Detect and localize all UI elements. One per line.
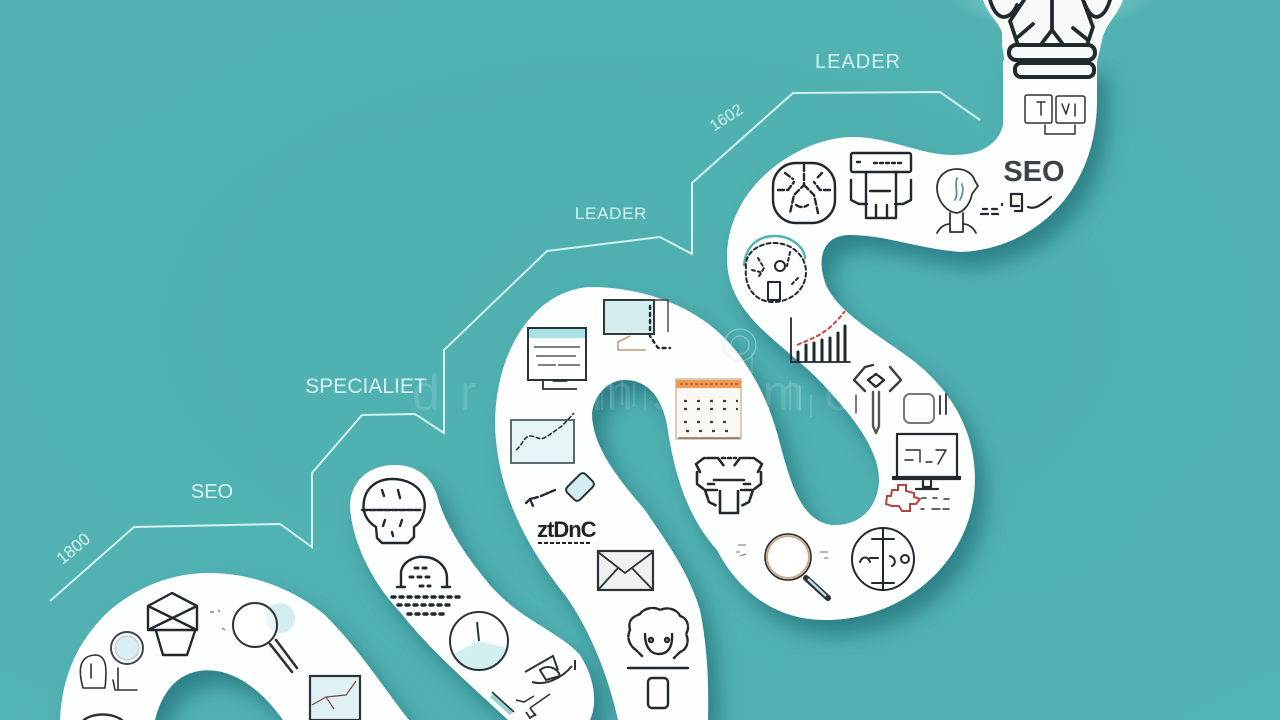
icon: bust and small plot — [80, 655, 137, 690]
icon: small glyph squiggle under SEO — [981, 194, 1051, 214]
icon: calendar with orange header — [676, 379, 741, 439]
road segment: lower-left arch — [60, 573, 409, 720]
icon: magnifier on road — [736, 534, 828, 598]
icon: laptop with chart — [893, 434, 960, 489]
road segment: main S curve up to the bulb — [495, 60, 1097, 720]
icon: dotted dome — [392, 557, 460, 614]
watermark: faint stock text — [412, 329, 852, 421]
icon: bracket and pencil — [854, 365, 901, 433]
label: LEADER top: LEADER — [815, 51, 901, 73]
icon: phone tile — [526, 471, 596, 506]
icon: envelope basket — [148, 593, 197, 655]
icon: envelope — [598, 551, 653, 590]
icon: blocky robot window — [851, 153, 911, 218]
chart: bar chart with red trend — [791, 311, 850, 362]
career path line — [50, 92, 980, 601]
icon: rounded circuit brain — [773, 163, 835, 223]
icon: dotted head brain — [362, 479, 425, 543]
icon: glowing brain light bulb — [952, 0, 1152, 80]
icon: light bulb person — [937, 169, 978, 233]
heading: SEO: SEO — [1003, 156, 1065, 188]
icon: circle brain — [852, 528, 914, 590]
icon: framed picture — [310, 676, 360, 720]
label: SEO path: SEO — [191, 481, 233, 503]
icon: stub near road bottom — [526, 708, 536, 718]
icon: round mirror — [111, 632, 143, 664]
road segment: middle capsule — [350, 465, 594, 720]
chart: line chart card — [511, 413, 574, 463]
icon: circuit tree face — [696, 458, 762, 513]
label: rotated 1602: 1602 — [707, 101, 746, 135]
icon: red puzzle piece and dashes — [886, 485, 949, 511]
icon: magnifier with teal disc — [210, 603, 297, 672]
text: garbled label: ztDnC — [537, 517, 597, 542]
label: rotated 1800: 1800 — [53, 529, 94, 568]
icon: partial dome at bottom edge — [82, 714, 124, 720]
icon: clock with teal wedge — [450, 612, 508, 670]
icon: monitor with teal screen — [604, 300, 670, 350]
label: LEADER middle: LEADER — [575, 204, 647, 223]
icon: browser window — [528, 328, 586, 389]
label: SPECIALIET: SPECIALIET — [305, 375, 427, 398]
icon: cup — [904, 394, 946, 423]
icon: brain with teal arc — [744, 236, 806, 302]
icon: bushy head on stand — [628, 608, 688, 708]
icon: two monitors — [1025, 95, 1085, 134]
watermark: faint stock text: dreamstime — [412, 365, 852, 421]
icon: pencil and hand — [492, 656, 575, 713]
road: white winding ribbon segments — [60, 60, 1097, 720]
